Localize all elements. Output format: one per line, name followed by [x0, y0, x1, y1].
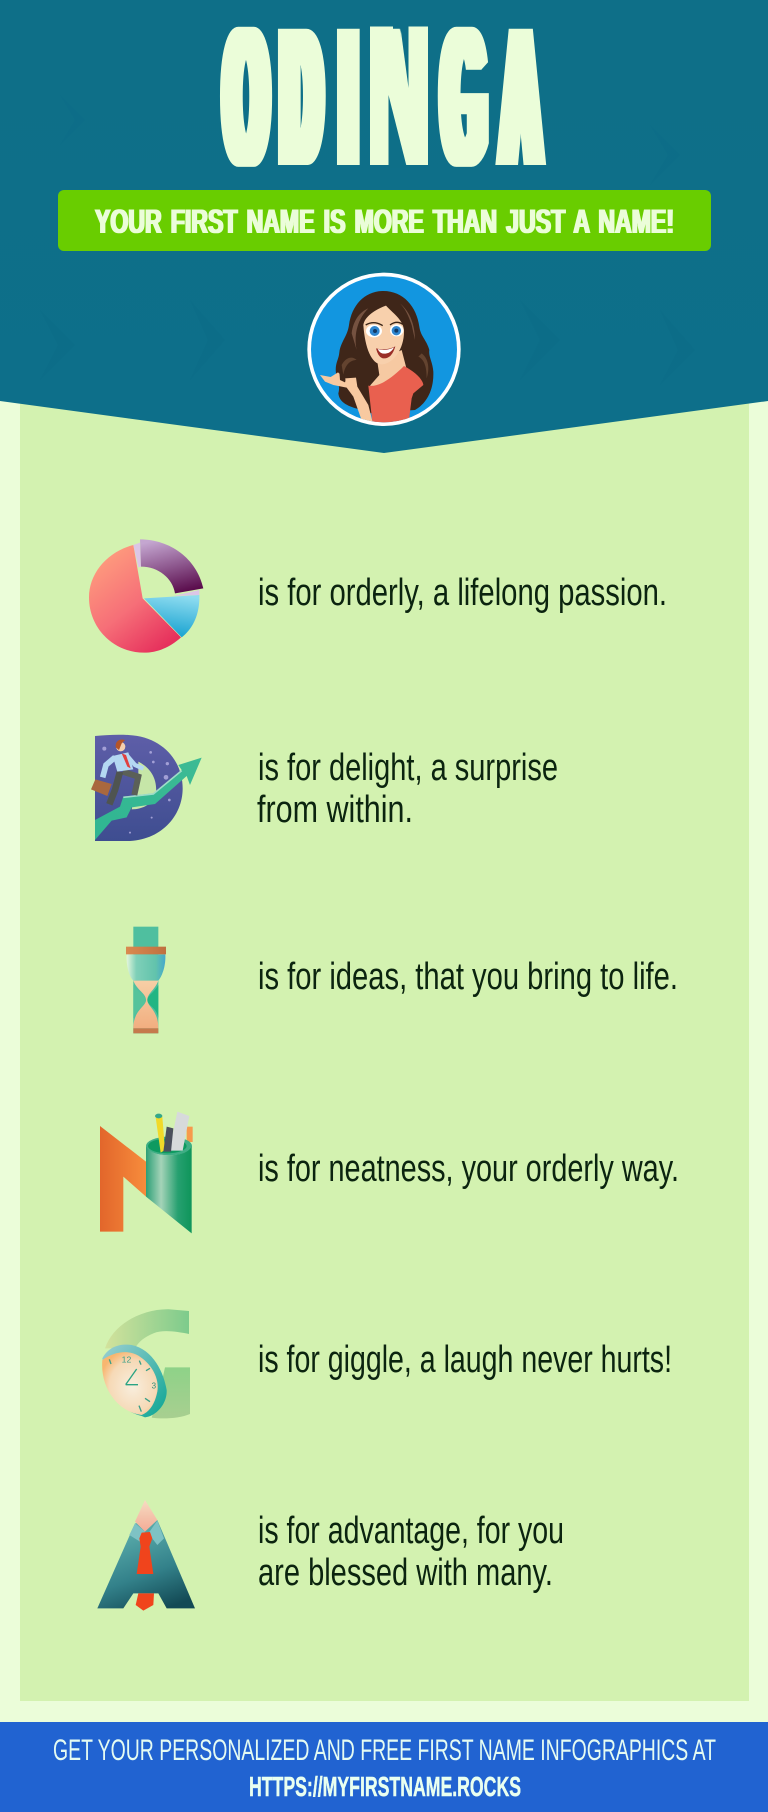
footer [0, 1722, 768, 1812]
content panel [20, 395, 749, 1701]
row 2 text [257, 747, 558, 831]
row 5: letter G clock icon [102, 1309, 190, 1418]
footer url: HTTPS://MYFIRSTNAME.ROCKS [249, 1771, 521, 1802]
banner [58, 190, 711, 251]
row 2: letter D with businessman icon [91, 735, 202, 841]
row 6 text: is for advantage, for you [258, 1510, 564, 1552]
row 5: letter G clock icon: 3 [152, 1381, 157, 1390]
row 4: letter N pencil holder icon [100, 1112, 193, 1233]
row 6 text: are blessed with many. [258, 1552, 553, 1594]
row 3: letter I hourglass icon [126, 927, 166, 1033]
header: teal chevron [0, 0, 768, 453]
row 6: letter A necktie icon [97, 1500, 195, 1611]
row 6 text [258, 1510, 564, 1594]
row 5: letter G clock icon: 12 [122, 1355, 131, 1365]
avatar: cartoon woman in circle [307, 273, 461, 426]
row 1: letter O pie chart icon [89, 539, 203, 653]
row 2 text: from within. [257, 789, 413, 831]
row 2 text: is for delight, a surprise [258, 747, 558, 789]
